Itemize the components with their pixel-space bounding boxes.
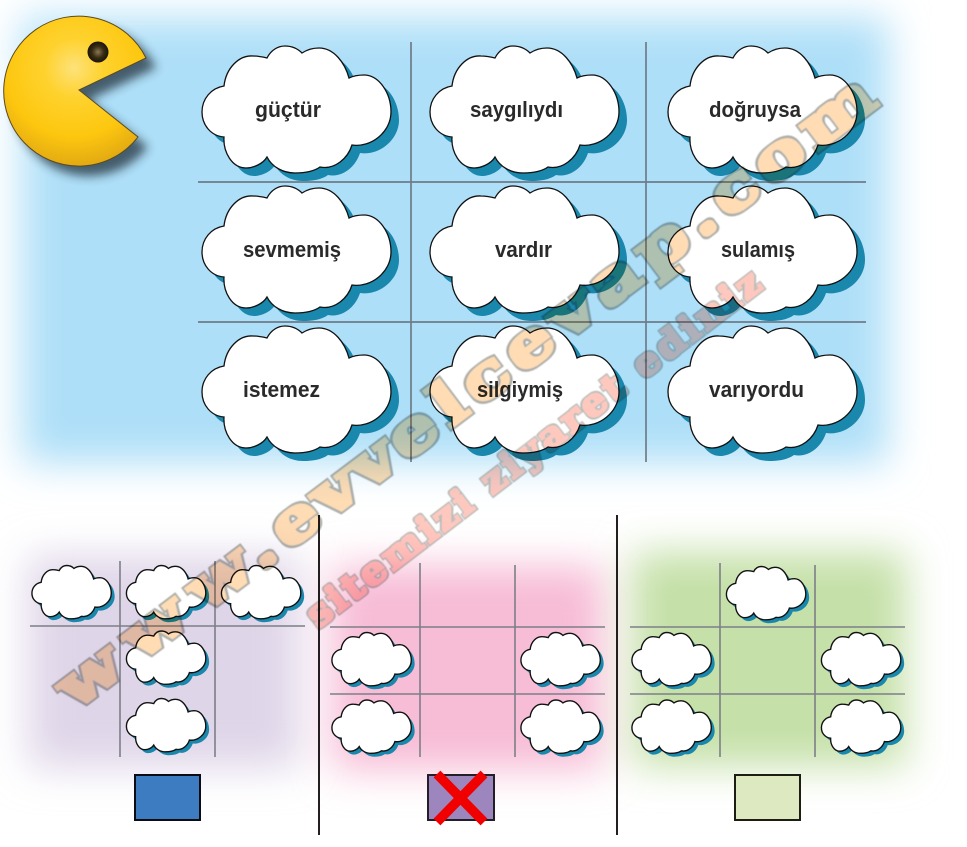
icon: pacman <box>4 16 156 176</box>
panel: blue word board background <box>22 18 888 463</box>
cloud: sevmemiş <box>202 186 399 321</box>
answer box: purple, crossed out in red <box>428 774 494 822</box>
panel: green option background <box>632 552 906 766</box>
dividers between options <box>319 515 617 835</box>
cloud: istemez <box>202 326 399 461</box>
cloud: sulamış <box>668 186 865 321</box>
cloud: vardır <box>430 186 627 321</box>
panel: purple option background <box>28 556 300 768</box>
cloud: vardır: vardır <box>495 237 552 262</box>
panel: pink option background <box>332 566 604 770</box>
watermark: visit message: sitemizi ziyaret ediniz <box>297 258 772 636</box>
cloud: silgiymiş: silgiymiş <box>477 377 563 402</box>
option three: green panel grid and clouds <box>630 563 905 757</box>
cloud: silgiymiş <box>430 326 627 461</box>
cloud: sevmemiş: sevmemiş <box>243 237 341 262</box>
option two: pink panel grid and clouds <box>330 563 605 757</box>
cloud: doğruysa: doğruysa <box>709 97 802 122</box>
cloud: saygılıydı <box>430 46 627 181</box>
cloud: saygılıydı: saygılıydı <box>470 97 563 122</box>
cloud: güçtür <box>202 46 399 181</box>
answer box: blue <box>135 775 200 820</box>
watermark: site address: www.evvelcevap.com <box>41 56 895 724</box>
cloud: güçtür: güçtür <box>255 97 321 122</box>
cloud: istemez: istemez <box>243 377 320 402</box>
cloud: doğruysa <box>668 46 865 181</box>
cloud: varıyordu: varıyordu <box>709 377 804 402</box>
answer box: green <box>735 775 800 820</box>
grid: word board lines <box>198 42 866 462</box>
option one: purple panel grid and clouds <box>30 561 305 757</box>
cloud: sulamış: sulamış <box>721 237 795 262</box>
cloud: varıyordu <box>668 326 865 461</box>
